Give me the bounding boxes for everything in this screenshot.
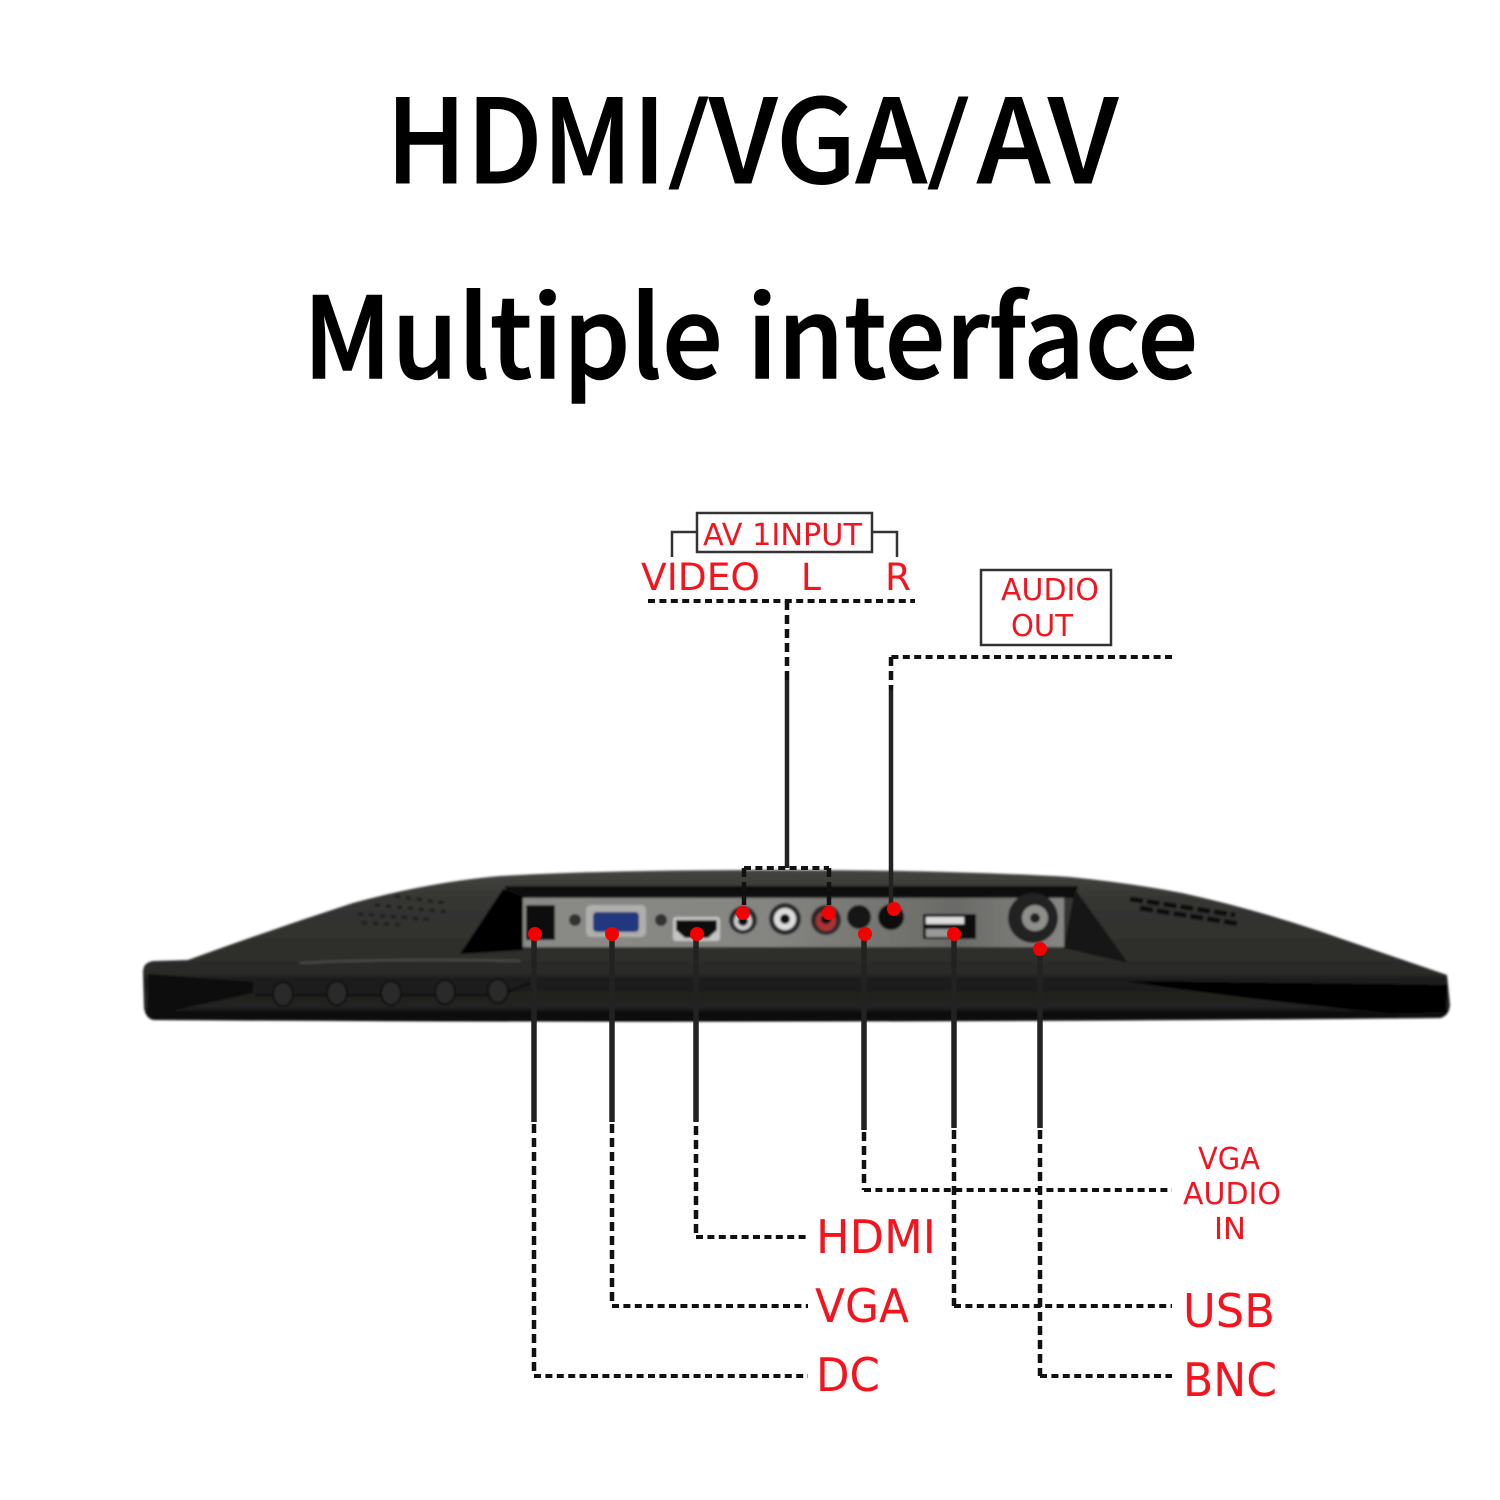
title: AV — [977, 49, 1119, 217]
AV input connector lines — [648, 601, 915, 908]
label: video, L, R: VIDEO — [641, 556, 760, 599]
lip highlight — [300, 960, 520, 963]
left speaker vents — [358, 896, 450, 925]
DC port — [526, 905, 555, 940]
label: VGA audio in: AUDIO — [1183, 1177, 1281, 1212]
label: VGA: VGA — [815, 1279, 909, 1333]
VGA audio in jack — [847, 905, 871, 929]
connector plate — [523, 898, 1064, 947]
title: VGA — [708, 49, 928, 217]
label: AV 1 input: AV 1INPUT — [703, 518, 863, 553]
VGA audio connector line — [864, 940, 1172, 1190]
label: USB: USB — [1183, 1284, 1275, 1338]
audio out connector line — [891, 657, 1172, 905]
USB port — [923, 914, 976, 939]
label: VGA audio in — [1183, 1142, 1281, 1247]
label: DC: DC — [816, 1348, 880, 1402]
button strip — [255, 983, 530, 995]
monitor body — [143, 870, 1450, 1022]
HDMI port — [673, 917, 720, 941]
label: video, L, R: R — [885, 556, 911, 599]
RCA video — [729, 906, 757, 934]
label: video, L, R: L — [801, 556, 821, 599]
VGA connector line — [612, 940, 808, 1306]
USB connector line — [954, 940, 1172, 1306]
label: audio out — [981, 570, 1111, 645]
label: audio out: AUDIO — [1001, 573, 1099, 608]
label: video, L, R — [641, 556, 911, 599]
label: HDMI: HDMI — [816, 1210, 936, 1264]
label: AV 1 input — [672, 513, 897, 557]
title: / — [668, 64, 710, 200]
title: Multiple interface — [303, 249, 1198, 411]
title — [303, 49, 1198, 411]
label: VGA audio in: VGA — [1198, 1142, 1260, 1177]
monitor rear view — [143, 870, 1450, 1022]
label: BNC: BNC — [1183, 1353, 1277, 1407]
BNC connector — [1008, 893, 1058, 943]
front buttons — [273, 979, 508, 1006]
title: / — [927, 64, 970, 200]
left recess wall — [460, 889, 523, 954]
audio out jack — [878, 904, 904, 930]
label: VGA audio in: IN — [1214, 1212, 1246, 1247]
right recess wall — [1064, 889, 1128, 963]
label: audio out: OUT — [1011, 609, 1074, 644]
title: HDMI — [386, 49, 666, 217]
recess top band — [505, 886, 1078, 898]
right speaker vents — [1130, 899, 1240, 924]
RCA left — [769, 903, 801, 935]
HDMI connector line — [696, 940, 808, 1237]
BNC connector line — [1040, 955, 1172, 1376]
left end shadow — [148, 974, 253, 1012]
right end shadow — [1125, 981, 1447, 1013]
VGA port — [569, 905, 667, 937]
port marker dots — [528, 902, 1047, 956]
DC connector line — [534, 940, 808, 1376]
RCA right — [811, 905, 841, 935]
